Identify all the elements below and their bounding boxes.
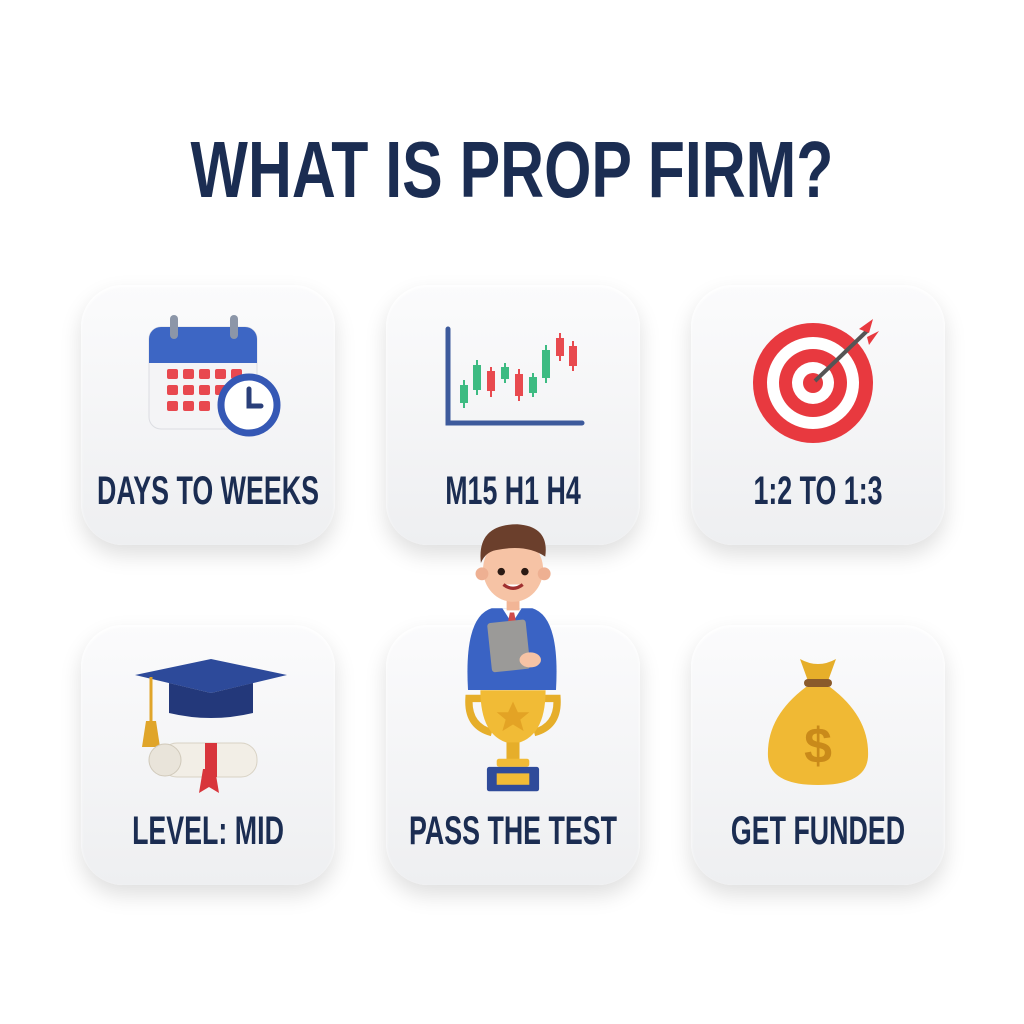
icon: calendar clock <box>148 315 280 436</box>
icon: graduation cap and diploma <box>135 659 287 793</box>
label: GET FUNDED <box>731 809 905 853</box>
panel: pass the test <box>386 625 640 885</box>
panel: level <box>81 625 335 885</box>
label: PASS THE TEST <box>409 809 617 853</box>
icon: candlestick chart <box>446 326 584 426</box>
icon: trophy <box>465 690 561 792</box>
icon: money bag: $ <box>804 718 832 774</box>
panel: days to weeks <box>81 285 335 545</box>
icon: businessman figure <box>467 524 557 690</box>
panel: get funded <box>691 625 945 885</box>
icon: target <box>753 319 879 443</box>
panel: timeframes <box>386 285 640 545</box>
label: M15 H1 H4 <box>445 469 581 513</box>
label: LEVEL: MID <box>132 809 284 853</box>
icon: money bag <box>768 659 868 785</box>
panel: risk reward <box>691 285 945 545</box>
label: DAYS TO WEEKS <box>97 469 319 513</box>
label: 1:2 TO 1:3 <box>753 469 883 513</box>
title: WHAT IS PROP FIRM? <box>191 125 833 214</box>
